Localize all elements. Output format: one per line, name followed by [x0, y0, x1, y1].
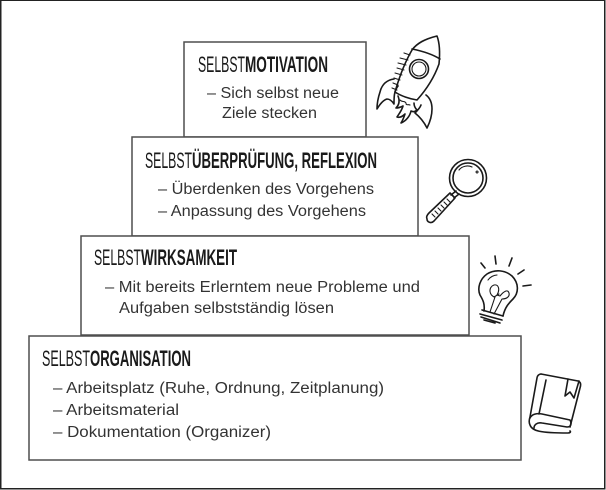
heading: Selbstwirksamkeit: SELBST — [94, 245, 141, 270]
panel: Selbstüberprüfung, Reflexion — [132, 137, 418, 236]
heading: Selbstorganisation: SELBST — [42, 346, 90, 371]
text: Selbstmotivation items: – Sich selbst neue — [207, 85, 339, 102]
text: Selbstorganisation items: – Dokumentation (Organizer) — [53, 424, 271, 441]
icon: rocket — [377, 36, 440, 128]
icon: magnifying glass — [427, 160, 486, 222]
heading: Selbstwirksamkeit: WIRKSAMKEIT — [141, 245, 237, 270]
text: Selbstüberprüfung items: – Überdenken des Vorgehens — [158, 180, 374, 198]
text: Selbstorganisation items: – Arbeitsplatz (Ruhe, Ordnung, Zeitplanung) — [53, 380, 384, 397]
heading: Selbstüberprüfung, Reflexion: ÜBERPRÜFUNG, REFLEXION — [192, 148, 377, 173]
text: Selbstwirksamkeit items: Aufgaben selbstständig lösen — [119, 300, 334, 317]
heading: Selbstorganisation — [42, 346, 191, 371]
icon: light bulb — [479, 256, 531, 323]
text: Selbstüberprüfung items — [158, 180, 374, 220]
panel: Selbstwirksamkeit — [81, 236, 469, 335]
heading: Selbstmotivation: MOTIVATION — [245, 52, 328, 77]
text: Selbstüberprüfung items: – Anpassung des Vorgehens — [158, 203, 366, 220]
text: Selbstwirksamkeit items: – Mit bereits Erlerntem neue Probleme und — [105, 279, 420, 296]
icon: book — [529, 374, 581, 433]
heading: Selbstorganisation: ORGANISATION — [90, 346, 191, 371]
panel: Selbstmotivation — [184, 42, 366, 137]
heading: Selbstüberprüfung, Reflexion — [145, 148, 377, 173]
heading: Selbstüberprüfung, Reflexion: SELBST — [145, 148, 192, 173]
text: Selbstwirksamkeit items — [105, 279, 420, 317]
text: Selbstorganisation items: – Arbeitsmaterial — [53, 402, 179, 419]
text: Selbstorganisation items — [53, 380, 384, 441]
heading: Selbstwirksamkeit — [94, 245, 237, 270]
heading: Selbstmotivation: SELBST — [198, 52, 245, 77]
heading: Selbstmotivation — [198, 52, 328, 77]
text: Selbstmotivation items — [207, 85, 339, 122]
text: Selbstmotivation items: Ziele stecken — [222, 105, 317, 122]
panel: Selbstorganisation — [29, 336, 521, 460]
